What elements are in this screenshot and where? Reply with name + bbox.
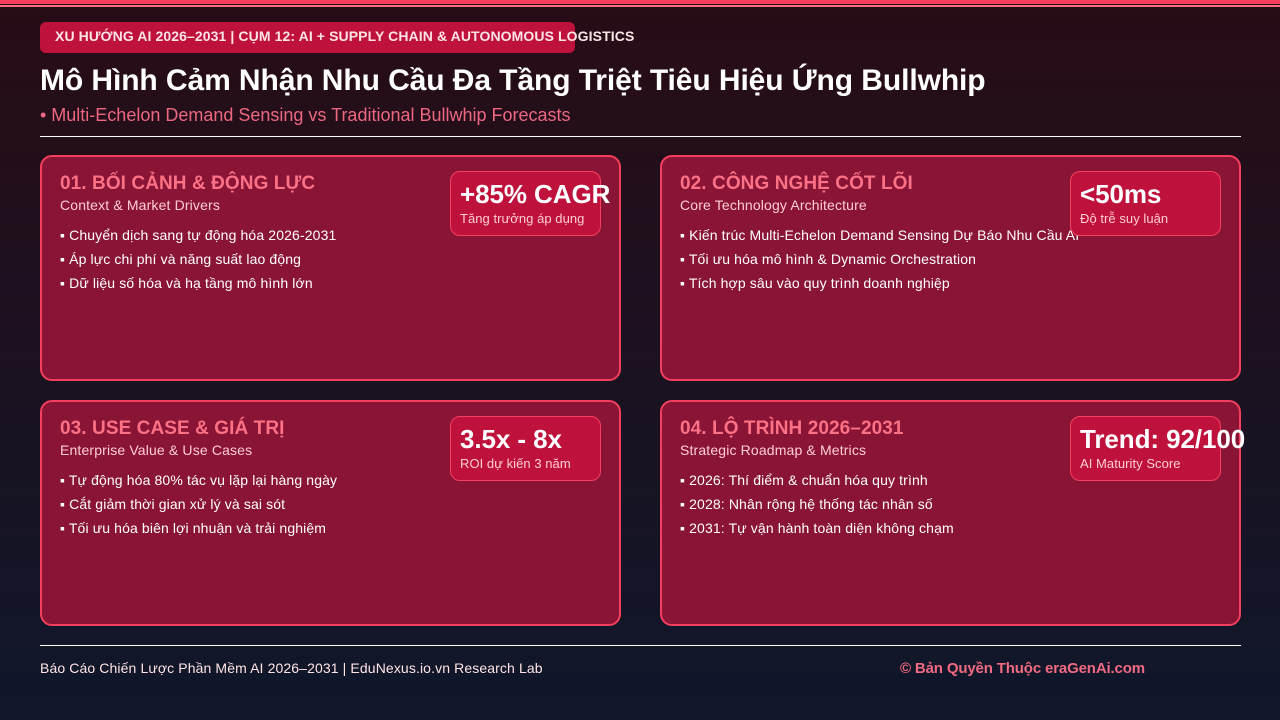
panel: 01 context: [40, 155, 621, 381]
footer copyright: © Bản Quyền Thuộc eraGenAi.com: [900, 660, 1145, 677]
metric value: <50ms: [1080, 179, 1161, 209]
title: Mô Hình Cảm Nhận Nhu Cầu Đa Tầng Triệt Tiêu Hiệu Ứng Bullwhip: [40, 64, 986, 97]
panel 02 heading: 02. CÔNG NGHỆ CỐT LÕI: [680, 173, 913, 194]
metric value: Trend: 92/100: [1080, 424, 1245, 454]
footer source: Báo Cáo Chiến Lược Phần Mềm AI 2026–2031 | EduNexus.io.vn Research Lab: [40, 660, 543, 676]
metric label: Tăng trưởng áp dụng: [460, 211, 584, 226]
panel 02 bullet 3: ▪ Tích hợp sâu vào quy trình doanh nghiệp: [680, 275, 950, 291]
metric value: 3.5x - 8x: [460, 424, 562, 454]
metric label: ROI dự kiến 3 năm: [460, 456, 571, 471]
metric label: AI Maturity Score: [1080, 456, 1181, 471]
panel 01 heading: 01. BỐI CẢNH & ĐỘNG LỰC: [60, 173, 315, 194]
badge text: XU HƯỚNG AI 2026–2031 | CỤM 12: AI + SUPPLY CHAIN & AUTONOMOUS LOGISTICS: [55, 28, 634, 44]
panel 03 heading: 03. USE CASE & GIÁ TRỊ: [60, 418, 285, 439]
panel 03 bullet 1: ▪ Tự động hóa 80% tác vụ lặp lại hàng ngày: [60, 472, 337, 488]
panel: 02 technology: [660, 155, 1241, 381]
panel 01 metric: [450, 171, 601, 236]
panel 01 bullet 2: ▪ Áp lực chi phí và năng suất lao động: [60, 251, 301, 267]
panel 04 subheading: Strategic Roadmap & Metrics: [680, 442, 866, 458]
panel 04 bullet 2: ▪ 2028: Nhân rộng hệ thống tác nhân số: [680, 496, 933, 512]
panel: 04 roadmap: [660, 400, 1241, 626]
metric value: +85% CAGR: [460, 179, 610, 209]
panel 02 subheading: Core Technology Architecture: [680, 197, 867, 213]
panel 01 bullet 1: ▪ Chuyển dịch sang tự động hóa 2026-2031: [60, 227, 336, 243]
panel 03 bullet 3: ▪ Tối ưu hóa biên lợi nhuận và trải nghiệm: [60, 520, 326, 536]
panel 04 metric: [1070, 416, 1221, 481]
header badge: [40, 22, 575, 53]
panel 04 heading: 04. LỘ TRÌNH 2026–2031: [680, 418, 904, 439]
panel 04 bullet 1: ▪ 2026: Thí điểm & chuẩn hóa quy trình: [680, 472, 928, 488]
top accent bar: [0, 0, 1280, 7]
panel 02 bullet 2: ▪ Tối ưu hóa mô hình & Dynamic Orchestration: [680, 251, 976, 267]
subtitle: • Multi-Echelon Demand Sensing vs Traditional Bullwhip Forecasts: [40, 105, 571, 125]
panel: 03 use case: [40, 400, 621, 626]
panel 02 metric: [1070, 171, 1221, 236]
panel 01 subheading: Context & Market Drivers: [60, 197, 220, 213]
panel 02 bullet 1: ▪ Kiến trúc Multi-Echelon Demand Sensing Dự Báo Nhu Cầu AI: [680, 227, 1079, 243]
panel 03 metric: [450, 416, 601, 481]
panel 01 bullet 3: ▪ Dữ liệu số hóa và hạ tầng mô hình lớn: [60, 275, 313, 291]
panel 03 subheading: Enterprise Value & Use Cases: [60, 442, 252, 458]
panel 03 bullet 2: ▪ Cắt giảm thời gian xử lý và sai sót: [60, 496, 285, 512]
metric label: Độ trễ suy luận: [1080, 211, 1168, 226]
panel 04 bullet 3: ▪ 2031: Tự vận hành toàn diện không chạm: [680, 520, 954, 536]
